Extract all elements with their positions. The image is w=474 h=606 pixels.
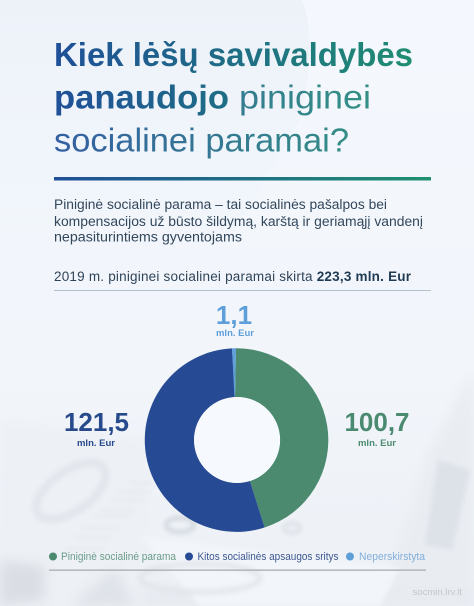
segment: Neperskirstyta — [232, 348, 236, 397]
budget total line: 2019 m. piniginei socialinei paramai skirta 223,3 mln. Eur — [54, 269, 412, 284]
total divider — [54, 290, 431, 291]
label: 121,5 mln. Eur: mln. Eur — [77, 438, 115, 449]
label: 1,1 mln. Eur: 1,1 — [216, 300, 252, 330]
label: 1,1 mln. Eur: mln. Eur — [216, 328, 254, 339]
legend item: Neperskirstyta: Neperskirstyta — [359, 551, 426, 563]
donut hole — [194, 397, 280, 483]
legend item: Piniginė socialinė parama: Piniginė socialinė parama — [61, 551, 177, 563]
intro paragraph: kompensacijos už būsto šildymą, karštą ir geriamąjį vandenį — [54, 214, 423, 229]
title — [54, 36, 413, 158]
title: piniginei — [239, 78, 371, 116]
source link text: socmin.lrv.lt — [413, 587, 462, 598]
label: 100,7 mln. Eur: 100,7 — [344, 407, 410, 437]
legend item: Kitos socialinės apsaugos sritys: Kitos socialinės apsaugos sritys — [198, 551, 339, 563]
intro paragraph: nepasiturintiems gyventojams — [54, 230, 242, 244]
label: 121,5 mln. Eur: 121,5 — [64, 407, 129, 437]
intro paragraph: Piniginė socialinė parama – tai socialinės pašalpos bei — [54, 197, 387, 212]
segment: Kitos socialinės apsaugos sritys — [145, 348, 265, 532]
legend — [49, 551, 426, 563]
donut chart — [145, 348, 328, 532]
legend divider — [49, 570, 426, 571]
segment: Piniginė socialinė parama — [235, 348, 328, 528]
title: panaudojo — [54, 78, 229, 116]
label: 100,7 mln. Eur: mln. Eur — [358, 438, 396, 449]
title: socialinei paramai? — [54, 122, 349, 158]
intro paragraph — [54, 197, 423, 244]
title: Kiek lėšų savivaldybės — [54, 36, 413, 73]
title divider — [54, 177, 431, 180]
